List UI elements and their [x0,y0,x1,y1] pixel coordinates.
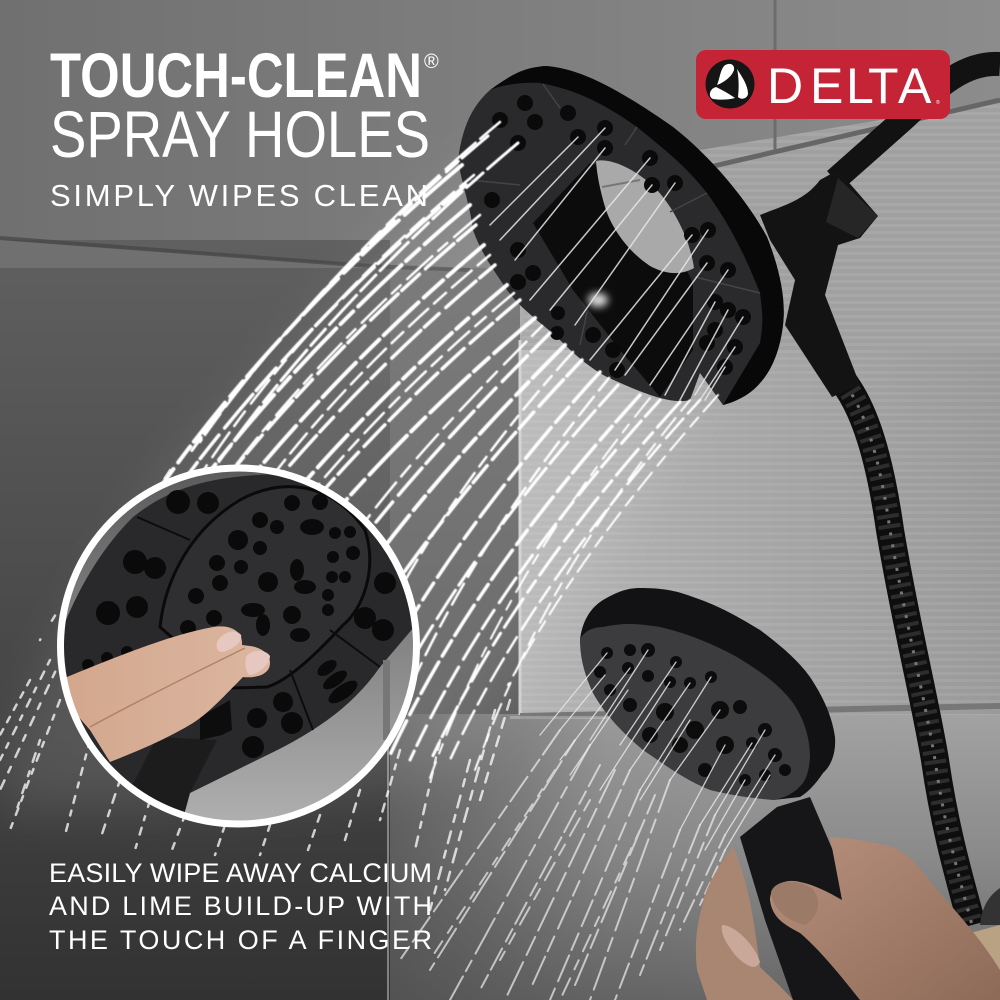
caption: THE TOUCH OF A FINGER [49,925,432,955]
inset nozzles [82,490,396,758]
caption: AND LIME BUILD-UP WITH [49,891,432,921]
far water spray and droplets [0,470,510,910]
title [50,41,439,213]
dark inner cylinder [533,163,693,397]
thin water jets across the overhead head [490,128,743,400]
hose and wall arm [835,64,1000,925]
flexible hose [838,375,972,925]
inset circle: finger wiping spray holes [40,466,420,830]
logo: Delta badge: ® [936,99,940,106]
shower arm [835,64,1000,180]
logo emblem [706,60,754,108]
caption: EASILY WIPE AWAY CALCIUM [49,858,432,888]
fingernail [722,925,760,967]
fingers behind handle [696,847,793,1000]
black rim band [490,66,784,405]
overhead shower head [458,66,784,405]
spray nozzles [484,95,751,378]
inset fingers [50,626,270,762]
inset handle [133,738,217,812]
thumb and palm [770,837,1000,1000]
segment lines [470,84,760,345]
finger crease [90,648,245,727]
hand shower nozzles [594,643,791,786]
title: ® [424,51,439,73]
hand shower back [580,588,835,800]
hand shower face [580,624,810,800]
hose holder bracket [760,170,878,397]
inset wall bar [383,660,390,740]
water spray from overhead shower head [162,122,718,778]
inset shower head disc [64,474,412,793]
hand holding the shower [696,837,1000,1000]
outer rim and face [458,66,784,405]
inset segment lines [137,517,380,730]
thin jets from hand shower [540,650,775,850]
title: SPRAY HOLES [50,97,430,171]
center opening [596,160,694,273]
title: SIMPLY WIPES CLEAN [50,178,428,213]
caption [49,858,432,955]
logo: Delta badge [696,50,950,119]
hand shower [580,588,867,1000]
wall fitting [970,925,1000,1000]
title: TOUCH-CLEAN [50,41,422,111]
inset shower face [160,487,370,688]
thumbnail [771,882,818,925]
water spray from hand shower [400,730,725,1000]
reflection highlight [588,293,608,307]
fingernails [217,631,270,675]
soft mist behind the spray [0,150,700,810]
handle [740,797,867,1000]
logo: Delta badge: DELTA [767,58,932,114]
